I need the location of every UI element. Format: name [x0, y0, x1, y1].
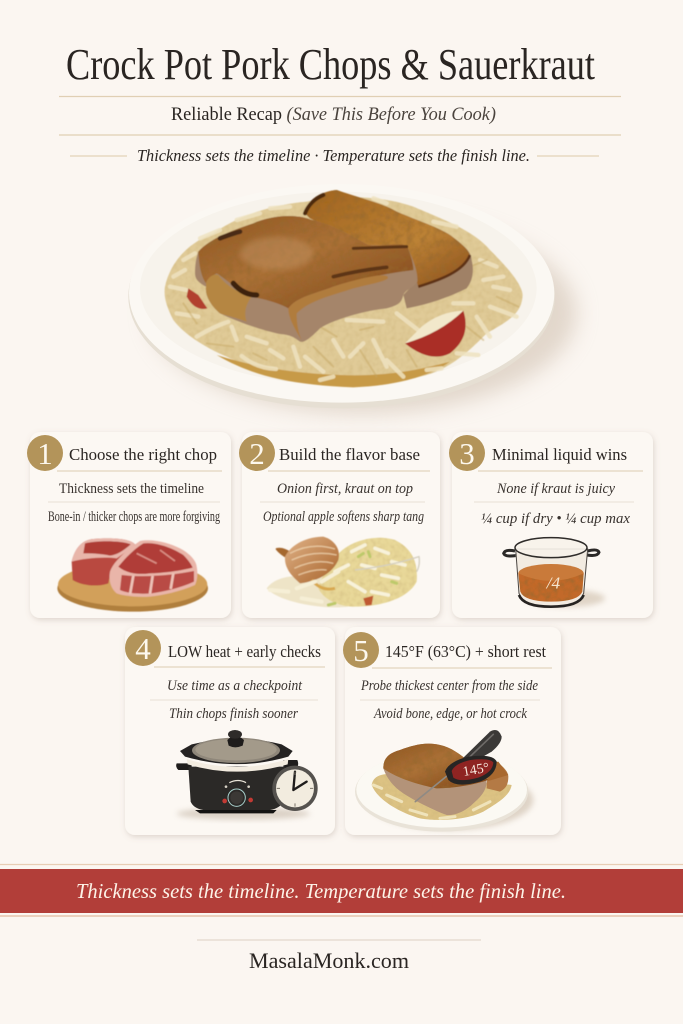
apple slice right — [405, 311, 466, 357]
apple slice left — [187, 288, 207, 309]
badge 4: 4 — [135, 631, 151, 666]
icon: glass pot with liquid — [504, 538, 605, 607]
line 1: Probe thickest center from the side — [360, 678, 538, 694]
heading 5: 145°F (63°C) + short rest — [385, 642, 546, 661]
subtitle: Reliable Recap (Save This Before You Cook) — [171, 104, 496, 125]
line 1: Thickness sets the timeline — [59, 481, 204, 497]
icon: chop on plate with thermometer — [355, 730, 533, 832]
badge 5: 5 — [353, 633, 369, 668]
line 2: Bone-in / thicker chops are more forgiving — [48, 509, 220, 525]
card 2: build the flavor base — [239, 432, 440, 618]
heading 1: Choose the right chop — [69, 445, 217, 464]
thermometer reading: 145° — [462, 761, 491, 780]
line 2: ¼ cup if dry • ¼ cup max — [481, 511, 631, 527]
card 5: target temperature and rest — [343, 627, 561, 835]
hero image: pork chops on sauerkraut plate — [128, 184, 577, 413]
badge 3: 3 — [459, 436, 475, 471]
pot measure label: /4 — [546, 573, 560, 592]
heading 3: Minimal liquid wins — [492, 445, 627, 464]
icon: raw chops on wooden board — [57, 538, 208, 612]
badge 5 — [343, 632, 379, 668]
badge 2 — [239, 435, 275, 471]
card 1: choose the right chop — [27, 432, 231, 618]
badge 3 — [449, 435, 485, 471]
line 2: Optional apple softens sharp tang — [263, 509, 424, 525]
tagline: Thickness sets the timeline · Temperature sets the finish line. — [137, 146, 530, 165]
badge 1 — [27, 435, 63, 471]
line 2: Thin chops finish sooner — [169, 706, 298, 722]
card 3: minimal liquid wins — [449, 432, 653, 618]
badge 1: 1 — [37, 436, 53, 471]
badge 4 — [125, 630, 161, 666]
line 1: Onion first, kraut on top — [277, 481, 413, 497]
closing banner — [0, 864, 683, 916]
icon: slow cooker — [176, 730, 318, 820]
line 1: None if kraut is juicy — [496, 481, 616, 497]
card 4: low heat and early checks — [125, 627, 335, 835]
line 2: Avoid bone, edge, or hot crock — [373, 706, 527, 722]
icon: onion and sauerkraut — [267, 537, 419, 607]
line 1: Use time as a checkpoint — [167, 678, 303, 694]
badge 2: 2 — [249, 436, 265, 471]
front chop — [195, 216, 417, 342]
back chop — [305, 190, 473, 308]
banner text: Thickness sets the timeline. Temperature sets the finish line. — [76, 879, 566, 903]
heading 4: LOW heat + early checks — [168, 642, 321, 661]
heading 2: Build the flavor base — [279, 445, 420, 464]
footer site name: MasalaMonk.com — [249, 948, 409, 973]
